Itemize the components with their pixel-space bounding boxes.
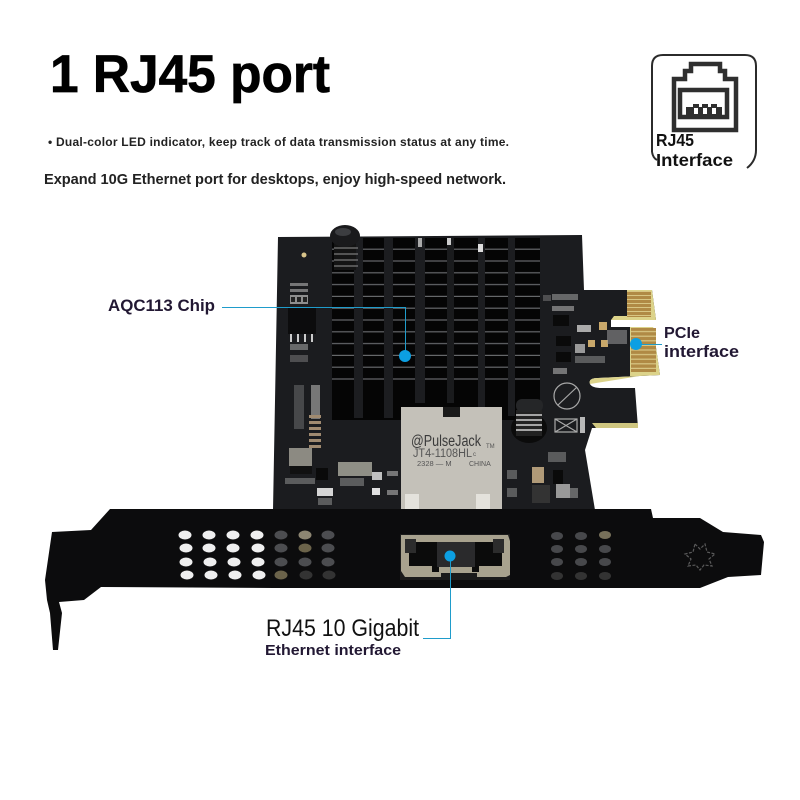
spring screw: bottom [511,399,547,443]
gold fingers [590,290,660,428]
RJ45 jack housing: @PulseJack [411,433,481,450]
text block: LED indicator note: • Dual-color LED indicator, keep track of data transmission status at any time. [48,135,509,149]
callout: AQC113 chip [108,296,411,362]
network card [45,225,764,650]
icon label: RJ45 [656,130,694,150]
spring screw: top [330,225,360,270]
callout: RJ45 10 Gigabit Ethernet interface: Ethernet interface [265,642,401,659]
callout: RJ45 10 Gigabit Ethernet interface [265,550,456,659]
bracket hole grid: right [551,531,611,580]
callout: PCIe interface: interface [664,342,739,361]
heatsink [332,238,540,420]
RJ45 port opening [400,534,510,580]
callout: PCIe interface [630,325,739,361]
RJ45 jack housing: 2328 — M [417,459,452,468]
pcb solder dot [302,252,306,258]
circuit board [273,235,660,510]
icon label: interface: Interface [656,150,733,170]
callout: AQC113 chip: AQC113 Chip [108,296,215,315]
bracket hole grid: left [178,530,336,580]
small components: left side [285,283,398,505]
title: 1 RJ45 port [50,45,330,104]
callout: PCIe interface: PCIe [664,325,700,342]
bracket embossed mark [685,544,715,570]
callout: RJ45 10 Gigabit Ethernet interface: RJ45 10 Gigabit [266,615,419,642]
RJ45 jack housing: c [473,452,476,458]
metal bracket [45,509,764,650]
RJ45 jack housing: CHINA [469,461,491,468]
icon: RJ45 interface [652,55,756,168]
text block: expansion note: Expand 10G Ethernet port for desktops, enjoy high-speed network. [44,172,506,188]
RJ45 jack housing: JT4-1108HL [413,448,473,460]
small components: right side [507,294,627,503]
RJ45 jack housing [401,407,502,510]
RJ45 jack housing: TM [486,444,495,450]
regulatory marks [554,383,585,433]
